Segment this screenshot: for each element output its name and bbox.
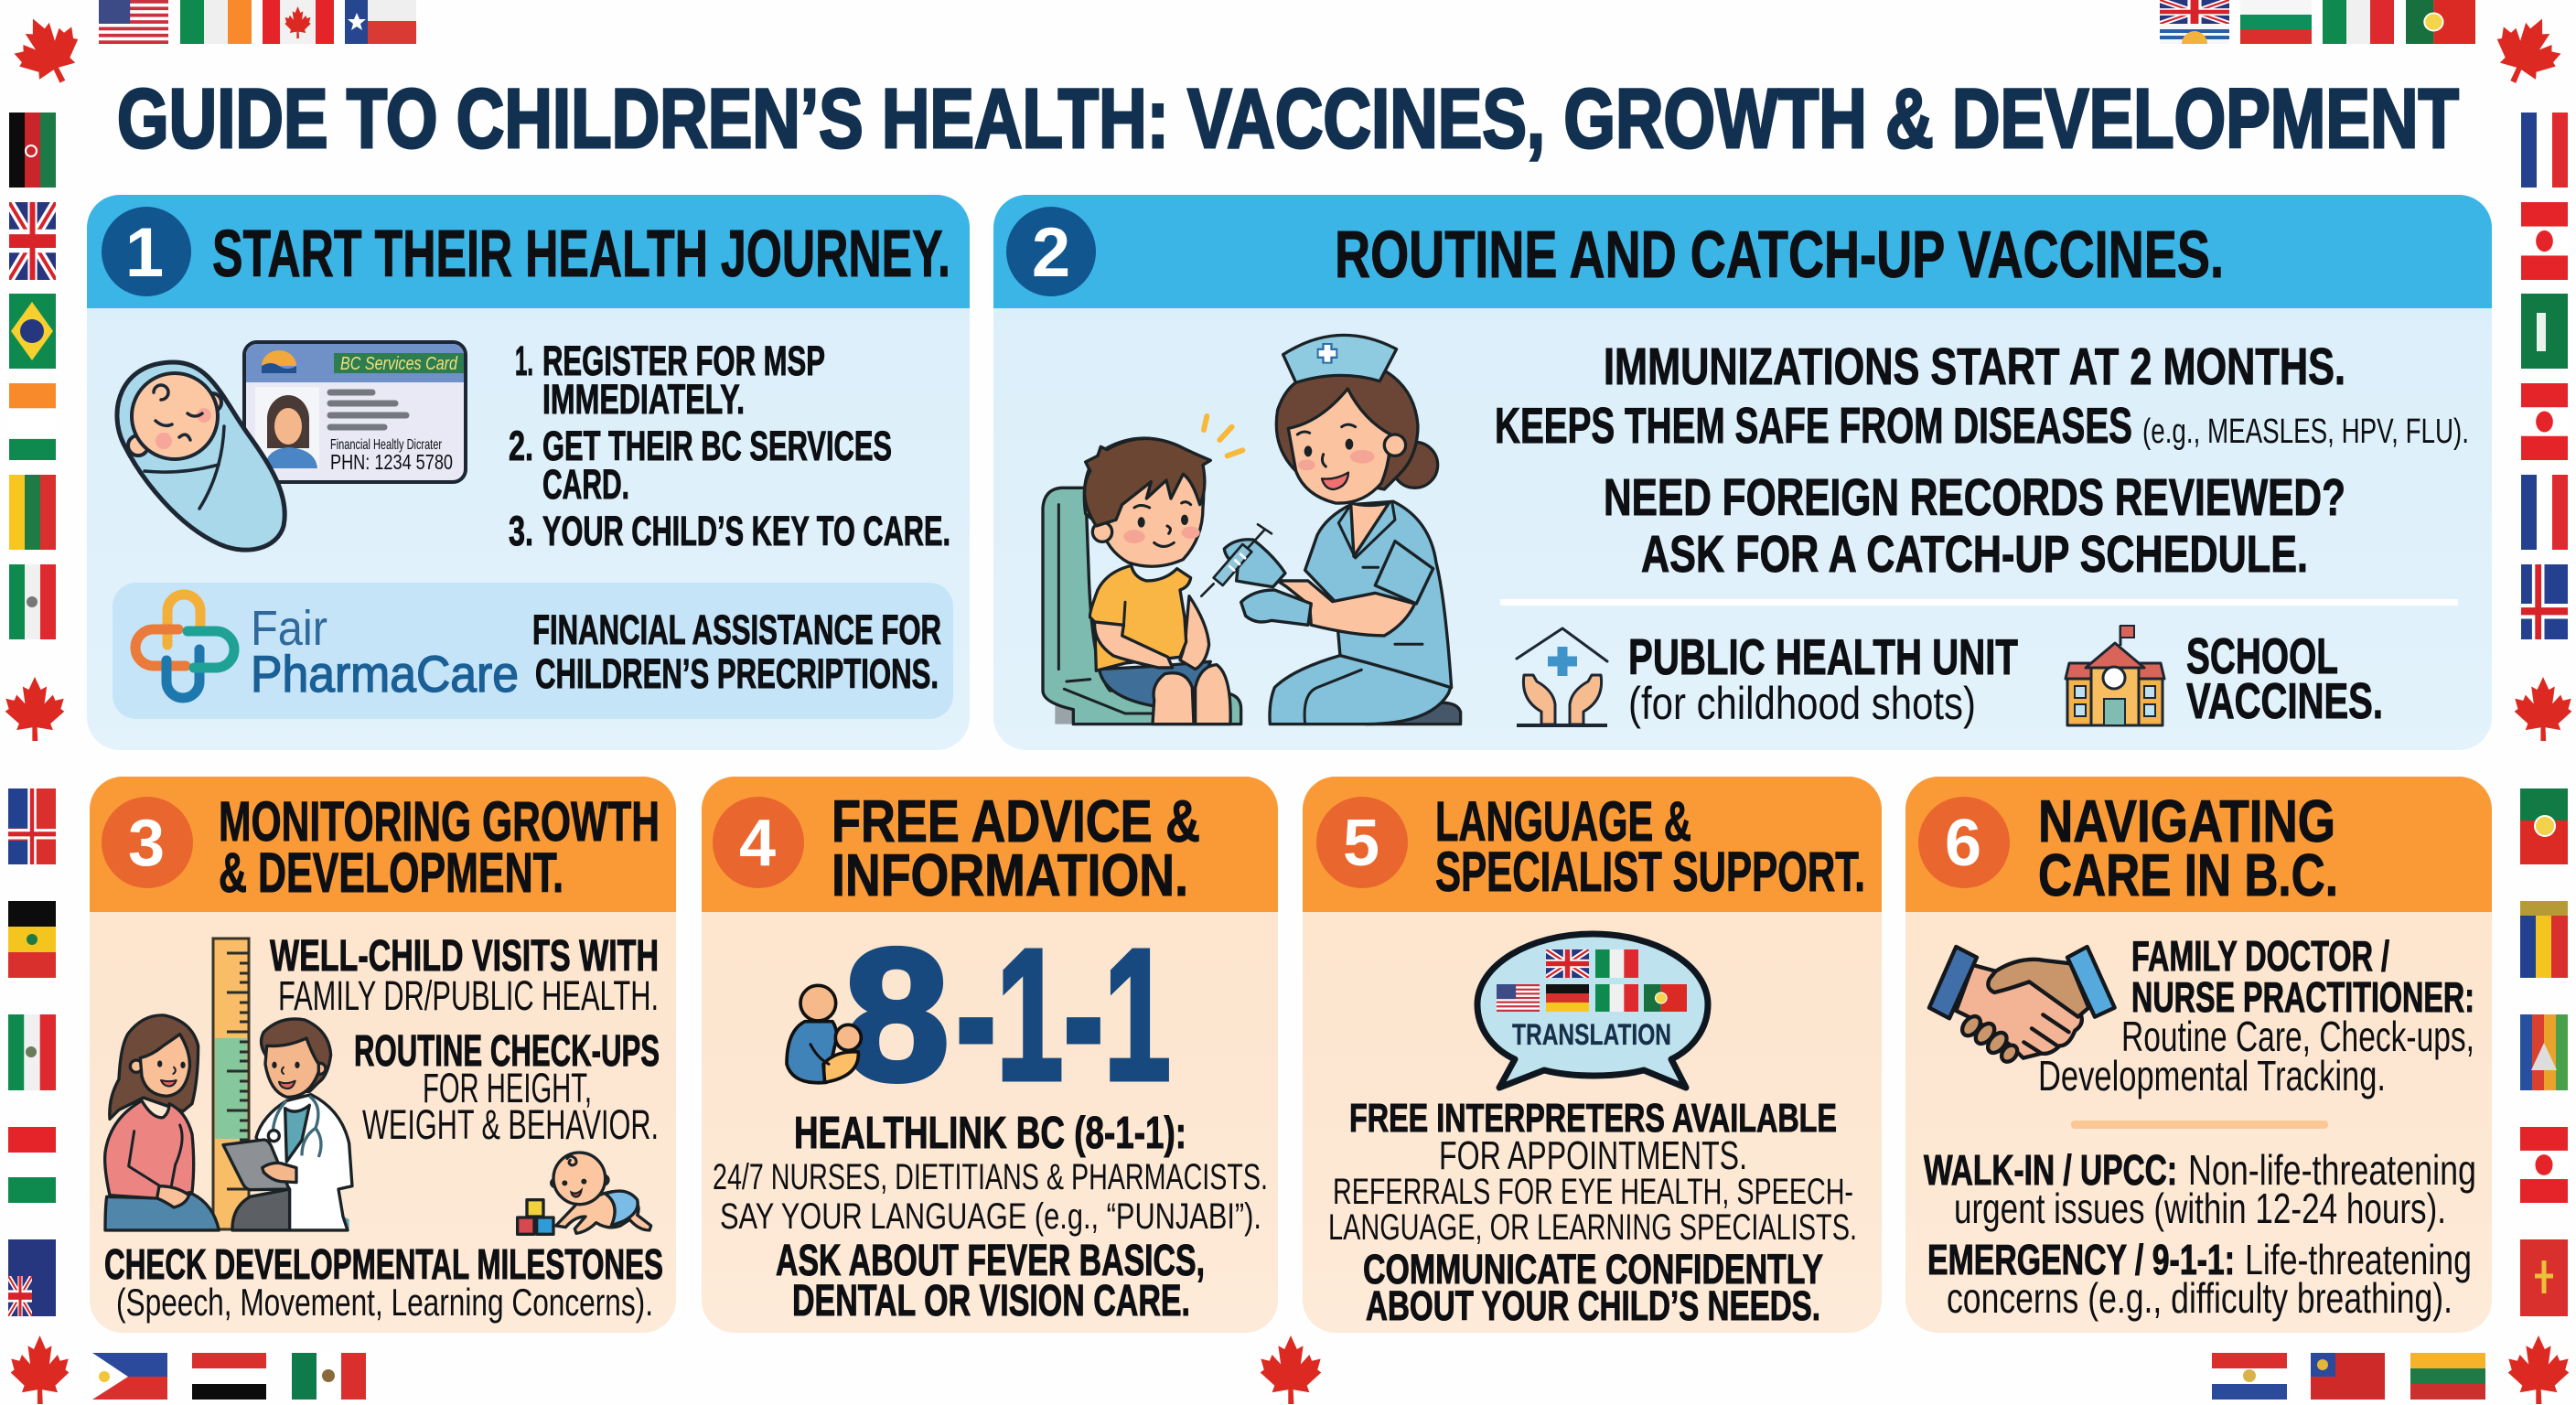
flags: bottom right xyxy=(2212,1353,2485,1400)
emergency text: Life-threatening xyxy=(2245,1236,2472,1283)
icon: maple leaf left xyxy=(5,677,64,741)
number badge 6: 6 xyxy=(1945,807,1981,880)
panel 1 header bar xyxy=(87,195,970,308)
fair pharmacare description xyxy=(532,606,941,697)
panel 3 heading: & DEVELOPMENT. xyxy=(219,842,564,904)
walk-in text xyxy=(1924,1146,2476,1232)
pain marks xyxy=(1204,416,1242,456)
panel 5: language and specialist support xyxy=(1303,777,1882,1333)
panel 6 heading: NAVIGATING xyxy=(2038,788,2335,854)
school vaccines text: VACCINES. xyxy=(2186,672,2383,729)
panel 4 header bar xyxy=(702,777,1278,912)
number badge 4 xyxy=(713,797,804,888)
icon: BC Services Card: BC Services Card xyxy=(340,354,458,374)
steps list: YOUR CHILD’S KEY TO CARE. xyxy=(542,508,950,554)
icon: parent and child xyxy=(787,985,861,1083)
fair pharmacare wordmark xyxy=(251,601,519,702)
healthlink text: HEALTHLINK BC (8-1-1): xyxy=(794,1109,1186,1158)
flags: right column lower xyxy=(2520,788,2568,1316)
big phone number 8-1-1 xyxy=(843,910,1171,1120)
vaccine text: NEED FOREIGN RECORDS REVIEWED? xyxy=(1604,468,2345,527)
icon: swaddled baby xyxy=(117,362,284,550)
illustration: crawling baby and blocks xyxy=(518,1153,651,1234)
flags: top left xyxy=(99,0,416,44)
fair pharmacare description: FINANCIAL ASSISTANCE FOR xyxy=(532,606,941,653)
icon: maple leaf right xyxy=(2515,677,2571,741)
interpreters text: COMMUNICATE CONFIDENTLY xyxy=(1363,1246,1823,1292)
child xyxy=(1084,438,1230,724)
big phone number 8-1-1: 8 xyxy=(843,910,950,1120)
steps list: REGISTER FOR MSP xyxy=(542,338,825,384)
number badge 4: 4 xyxy=(739,807,776,880)
interpreters text: LANGUAGE, OR LEARNING SPECIALISTS. xyxy=(1328,1207,1857,1248)
illustration: nurse vaccinating child xyxy=(1043,335,1461,724)
panel 3 heading xyxy=(219,790,660,904)
number badge 2: 2 xyxy=(1032,214,1070,292)
steps list: GET THEIR BC SERVICES xyxy=(542,423,892,469)
healthlink text xyxy=(713,1109,1268,1325)
well-child text: ROUTINE CHECK-UPS xyxy=(354,1027,660,1076)
panel 3 header bar xyxy=(90,777,676,912)
milestones text xyxy=(104,1240,663,1324)
panel 1: start their health journey xyxy=(87,195,970,750)
school vaccines text: SCHOOL xyxy=(2186,627,2338,684)
family doctor text: FAMILY DOCTOR / xyxy=(2131,932,2389,980)
panel 6 header bar xyxy=(1905,777,2492,912)
well-child text xyxy=(270,932,660,1148)
walk-in text: Non-life-threatening xyxy=(2188,1146,2476,1194)
steps list: 3. xyxy=(509,508,533,554)
panel 4 heading xyxy=(832,788,1200,908)
steps list: IMMEDIATELY. xyxy=(542,376,745,423)
public health unit text xyxy=(1628,628,2018,729)
vaccine text: IMMUNIZATIONS START AT 2 MONTHS. xyxy=(1604,338,2345,396)
chair xyxy=(1043,488,1241,724)
family doctor text: Developmental Tracking. xyxy=(2038,1052,2386,1099)
vaccine text: (e.g., MEASLES, HPV, FLU). xyxy=(2142,413,2469,451)
panel 2 header bar xyxy=(993,195,2492,308)
fair pharmacare wordmark: PharmaCare xyxy=(251,645,519,702)
interpreters text: FREE INTERPRETERS AVAILABLE xyxy=(1349,1096,1837,1141)
panel 6 heading: CARE IN B.C. xyxy=(2038,842,2338,908)
steps list: 2. xyxy=(509,423,533,469)
nurse xyxy=(1201,335,1461,724)
number badge 3: 3 xyxy=(128,807,165,880)
number badge 1 xyxy=(102,207,191,296)
family doctor text xyxy=(2038,932,2474,1099)
icon: maple leaf top left xyxy=(4,5,91,95)
milestones text: CHECK DEVELOPMENTAL MILESTONES xyxy=(104,1240,663,1288)
icon: Fair PharmaCare logo xyxy=(135,595,234,698)
panel 5 header bar xyxy=(1303,777,1882,912)
healthlink text: SAY YOUR LANGUAGE (e.g., “PUNJABI”). xyxy=(720,1196,1261,1237)
flags: right column upper xyxy=(2521,113,2568,639)
flags: left column lower xyxy=(8,788,56,1316)
illustration: growth ruler xyxy=(213,938,249,1229)
icon: translation speech bubble: TRANSLATION xyxy=(1512,1018,1671,1051)
healthlink text: DENTAL OR VISION CARE. xyxy=(792,1277,1190,1325)
interpreters text: ABOUT YOUR CHILD’S NEEDS. xyxy=(1366,1282,1820,1329)
icon: BC Services Card: PHN: 1234 5780 xyxy=(330,450,453,474)
healthlink text: 24/7 NURSES, DIETITIANS & PHARMACISTS. xyxy=(713,1157,1268,1197)
icon: maple leaf bottom centre xyxy=(1261,1335,1321,1404)
number badge 5 xyxy=(1316,797,1408,888)
flags: left column upper xyxy=(9,113,56,639)
vaccine text: ASK FOR A CATCH-UP SCHEDULE. xyxy=(1641,525,2308,584)
fair pharmacare wordmark: Fair xyxy=(251,601,327,656)
number badge 1: 1 xyxy=(125,214,164,292)
steps list xyxy=(509,338,950,554)
emergency text: EMERGENCY / 9-1-1: xyxy=(1927,1236,2235,1283)
panel 1 heading: START THEIR HEALTH JOURNEY. xyxy=(212,218,950,291)
walk-in text: WALK-IN / UPCC: xyxy=(1924,1146,2177,1194)
panel 4: free advice and information xyxy=(702,777,1278,1333)
icon: BC Services Card xyxy=(244,342,466,482)
icon: maple leaf bottom left xyxy=(11,1335,69,1404)
icon: BC Services Card: Financial Healtly Dicrater xyxy=(330,437,442,453)
icon: school xyxy=(2066,626,2164,725)
illustration: mother xyxy=(105,1015,219,1230)
steps list: 1. xyxy=(515,338,533,384)
well-child text: WEIGHT & BEHAVIOR. xyxy=(362,1101,659,1148)
icon: translation speech bubble xyxy=(1477,934,1708,1088)
icon: maple leaf bottom right xyxy=(2508,1335,2569,1404)
panel 4 heading: INFORMATION. xyxy=(832,842,1188,908)
fair pharmacare description: CHILDREN’S PRECRIPTIONS. xyxy=(535,650,939,697)
icon: handshake xyxy=(1929,947,2115,1065)
illustration: doctor xyxy=(223,1019,352,1230)
vaccine text: KEEPS THEM SAFE FROM DISEASES xyxy=(1495,397,2132,454)
icon: maple leaf top right xyxy=(2484,5,2571,95)
well-child text: FAMILY DR/PUBLIC HEALTH. xyxy=(278,972,659,1019)
flags: top right xyxy=(2160,0,2475,44)
well-child text: FOR HEIGHT, xyxy=(423,1065,592,1111)
public health unit text: (for childhood shots) xyxy=(1628,678,1976,729)
milestones text: (Speech, Movement, Learning Concerns). xyxy=(116,1281,653,1324)
panel 3: monitoring growth and development xyxy=(90,777,676,1333)
number badge 3 xyxy=(102,797,193,888)
panel 5 heading xyxy=(1435,790,1865,903)
public health unit text: PUBLIC HEALTH UNIT xyxy=(1628,628,2018,685)
interpreters text: FOR APPOINTMENTS. xyxy=(1439,1133,1747,1178)
panel 4 heading: FREE ADVICE & xyxy=(832,788,1200,854)
steps list: CARD. xyxy=(542,461,629,508)
panel 2 heading: ROUTINE AND CATCH-UP VACCINES. xyxy=(1335,219,2224,292)
panel 6 heading xyxy=(2038,788,2338,908)
panel 2: routine and catch-up vaccines xyxy=(993,195,2492,750)
panel 5 heading: LANGUAGE & xyxy=(1435,790,1691,853)
big phone number 8-1-1: -1-1 xyxy=(956,910,1171,1120)
panel 6: navigating care in b.c. xyxy=(1905,777,2492,1333)
well-child text: WELL-CHILD VISITS WITH xyxy=(270,932,659,981)
icon: public health unit xyxy=(1517,628,1607,725)
panel 3 heading: MONITORING GROWTH xyxy=(219,790,660,853)
vaccine text xyxy=(1495,338,2469,584)
interpreters text: REFERRALS FOR EYE HEALTH, SPEECH- xyxy=(1333,1172,1853,1212)
fair pharmacare box xyxy=(113,583,953,719)
panel 5 heading: SPECIALIST SUPPORT. xyxy=(1435,841,1865,903)
interpreters text xyxy=(1328,1096,1857,1329)
number badge 2 xyxy=(1006,207,1096,296)
number badge 6 xyxy=(1918,797,2010,888)
school vaccines text xyxy=(2186,627,2383,729)
emergency text xyxy=(1927,1236,2472,1322)
number badge 5: 5 xyxy=(1343,807,1379,880)
flags: bottom left xyxy=(92,1353,366,1400)
healthlink text: ASK ABOUT FEVER BASICS, xyxy=(776,1237,1205,1285)
